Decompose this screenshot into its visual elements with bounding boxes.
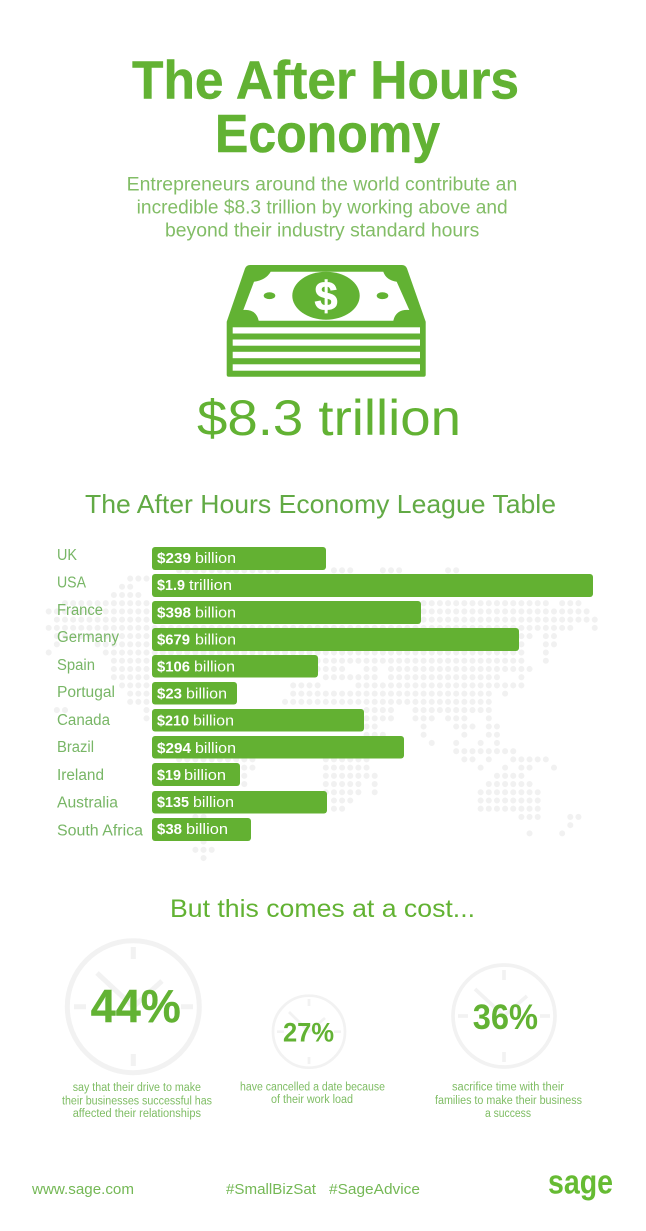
row: Germany: $679 [157,632,190,648]
icon: medium clock [453,965,555,1067]
caption: their businesses successful has [62,1096,212,1108]
total amount: $8.3 trillion [197,390,461,446]
row: Spain [57,655,318,678]
stat: 44%: 44% [91,980,181,1032]
row: Canada: Canada [57,712,110,729]
caption: affected their relationships [73,1108,201,1120]
row: UK: billion [195,550,236,567]
subtitle: beyond their industry standard hours [165,221,479,242]
row: UK: $239 [157,550,191,567]
row: UK: UK [57,547,78,564]
icon: stack of money [227,265,426,377]
row: France: France [57,602,103,619]
stat: 36%: 36% [473,998,538,1037]
row: Ireland [57,763,240,786]
row: Spain: $106 [157,658,190,676]
footer hashtags: #SmallBizSat [226,1181,317,1198]
row: Spain: Spain [57,657,95,674]
row: Australia: Australia [57,794,118,812]
row: South Africa: South Africa [57,822,143,840]
stat: 44% [62,941,212,1120]
row: Spain: billion [194,658,235,676]
icon: small clock [273,996,345,1068]
stat: 27% [240,996,385,1106]
row: Portugal [57,682,237,704]
row: Portugal: Portugal [57,684,115,701]
row: Germany [57,628,519,651]
row: Ireland: $19 [157,767,181,784]
subtitle: Entrepreneurs around the world contribute an [127,175,517,196]
row: France: billion [195,604,236,622]
sage logo: sage [548,1164,613,1202]
row: South Africa [57,818,251,841]
caption [62,1082,212,1120]
row: UK [57,547,326,570]
row: Brazil: Brazil [57,739,94,756]
footer hashtags [226,1181,420,1198]
caption [240,1082,385,1106]
row: Brazil [57,736,404,758]
row: Australia [57,791,327,814]
row: Portugal: $23 [157,686,182,702]
caption: have cancelled a date because [240,1082,385,1094]
row: Canada [57,709,364,732]
title: Economy [215,105,440,164]
subtitle [127,175,517,242]
row: Australia: billion [193,794,234,811]
dotted world map [49,570,595,858]
row: Ireland: billion [184,767,226,784]
caption [435,1082,582,1120]
row: USA: trillion [189,577,232,594]
row: Ireland: Ireland [57,767,104,784]
league table [57,547,593,841]
title: The After Hours [132,52,519,110]
footer hashtags: #SageAdvice [329,1181,420,1198]
row: France [57,601,421,624]
row: USA: USA [57,574,87,592]
row: USA: $1.9 [157,577,185,594]
icon: large clock [67,941,199,1073]
icon: stack of money: $ [315,273,338,319]
row: France: $398 [157,604,191,622]
row: Brazil: billion [195,740,236,757]
league table heading: The After Hours Economy League Table [85,489,556,519]
stat: 27%: 27% [283,1018,334,1048]
row: Portugal: billion [186,686,227,702]
row: Canada: $210 [157,712,189,730]
row: Australia: $135 [157,794,189,811]
cost heading: But this comes at a cost... [170,895,475,923]
title [132,52,519,164]
row: Germany: Germany [57,629,119,646]
row: Brazil: $294 [157,740,192,757]
caption: a success [485,1108,531,1120]
footer url: www.sage.com [31,1181,134,1198]
row: South Africa: $38 [157,821,182,838]
caption: of their work load [271,1094,353,1106]
row: USA [57,574,593,597]
caption: families to make their business [435,1095,582,1107]
caption: say that their drive to make [73,1082,201,1094]
stat: 36% [435,965,582,1120]
subtitle: incredible $8.3 trillion by working above and [137,198,508,218]
row: Canada: billion [193,712,234,730]
caption: sacrifice time with their [452,1082,564,1094]
row: South Africa: billion [186,821,228,838]
row: Germany: billion [195,632,236,648]
